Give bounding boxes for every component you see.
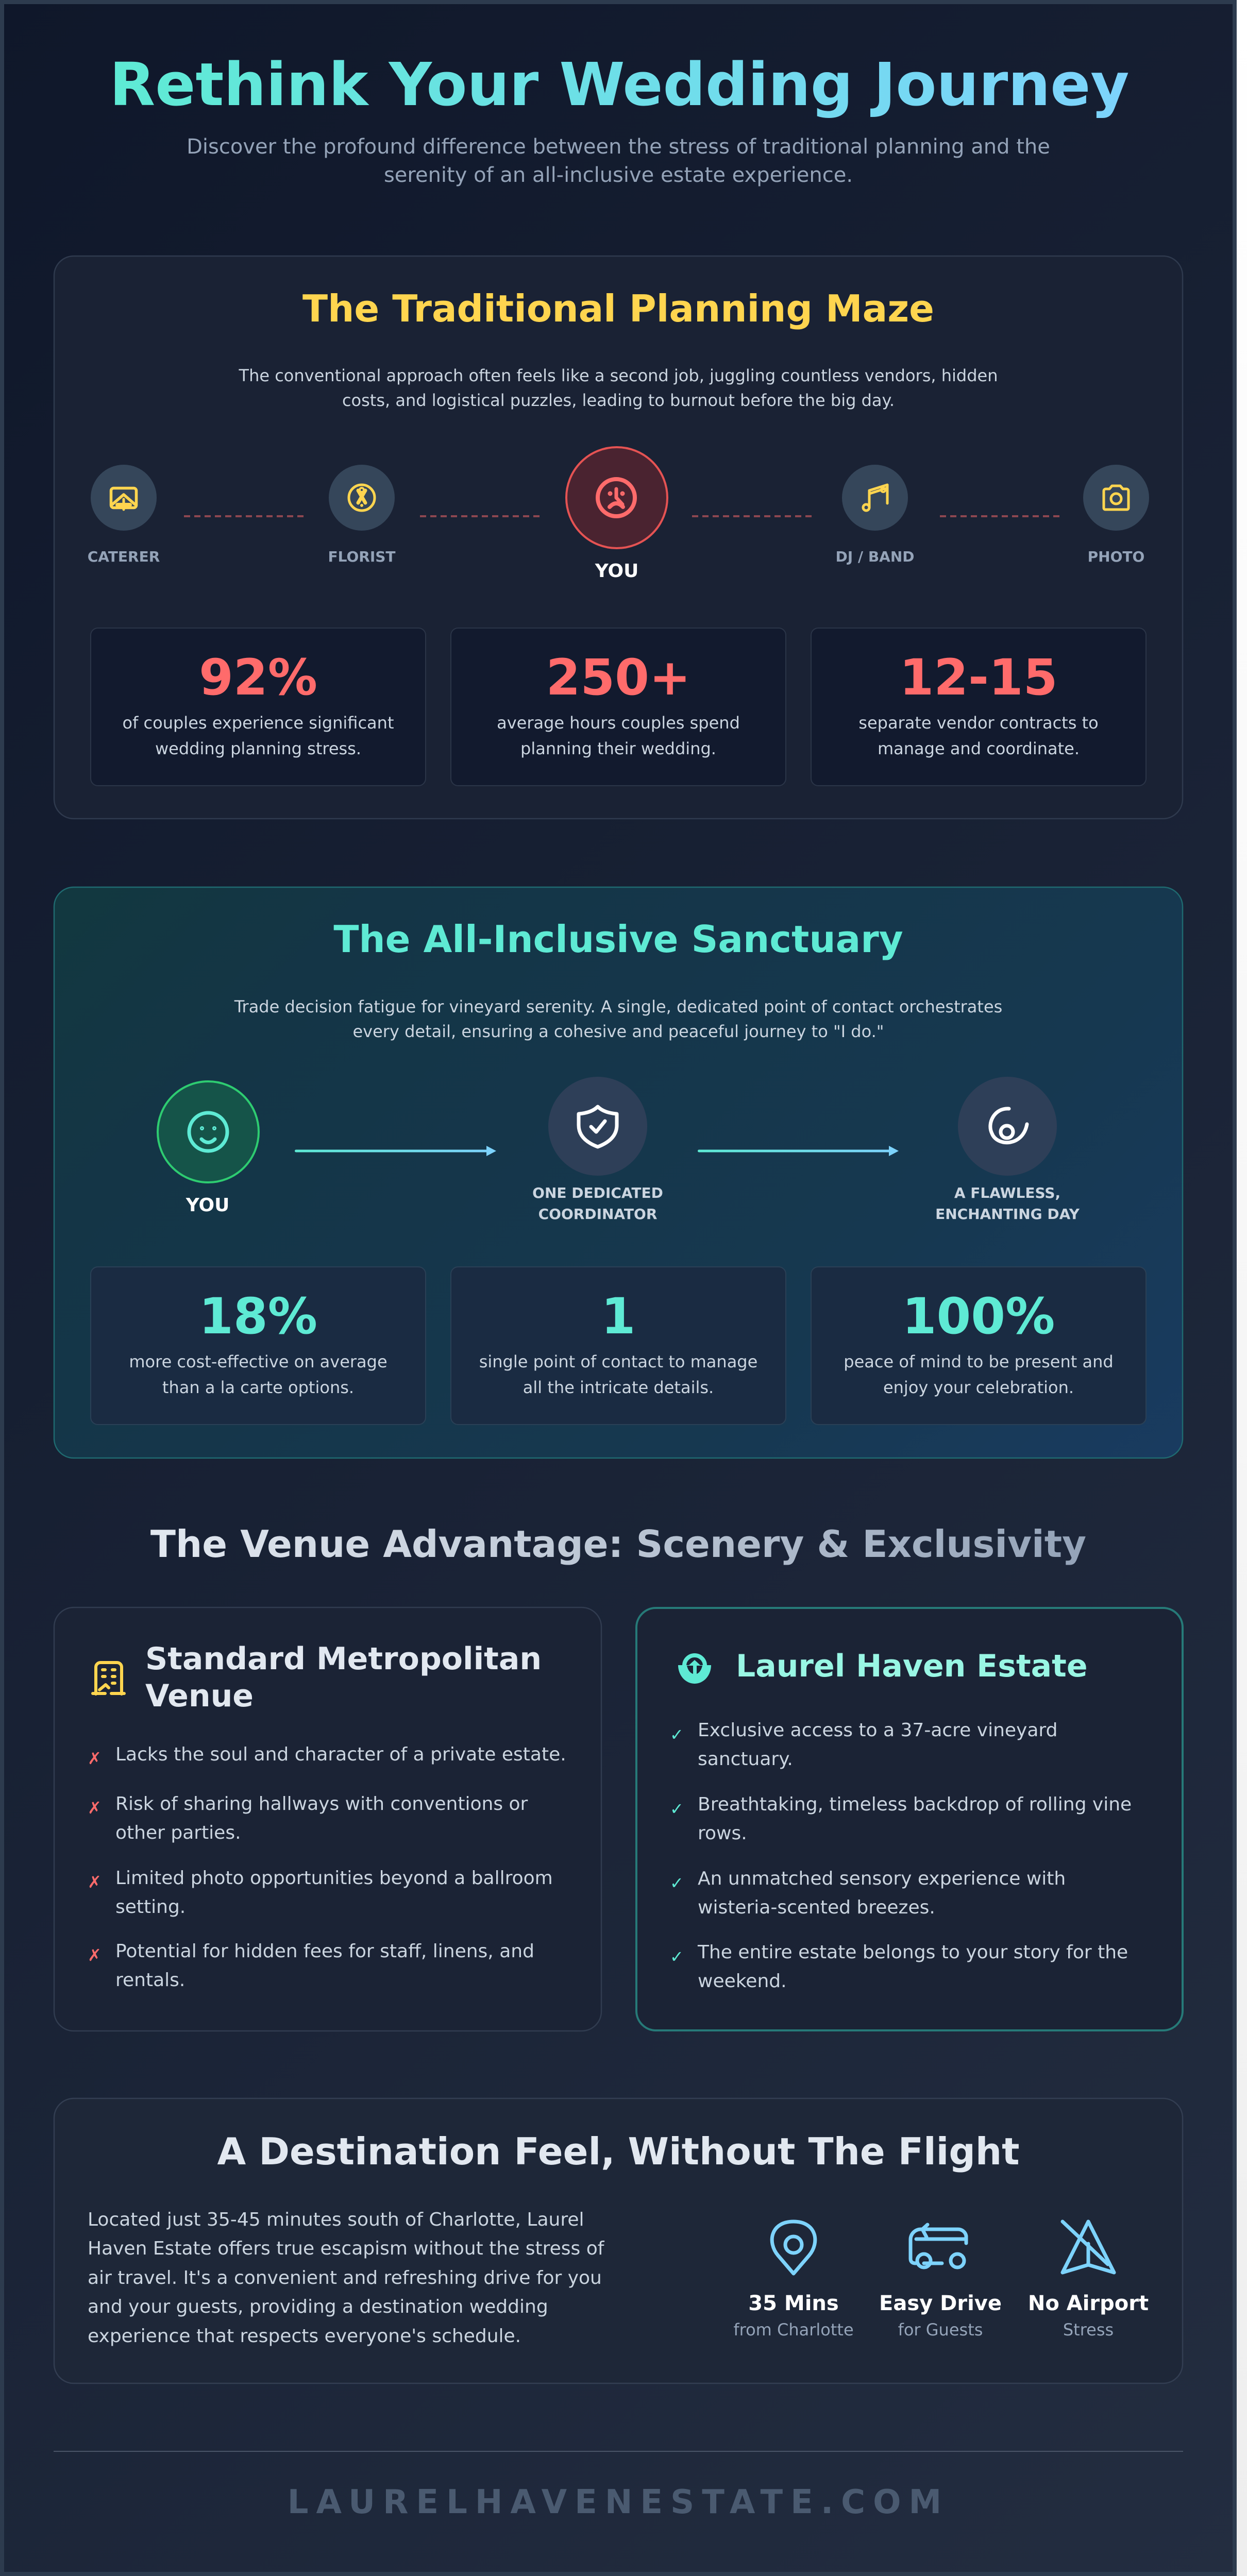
list: advantages: ✓ <box>670 1799 684 1819</box>
list: advantages: weekend. <box>698 1971 787 1992</box>
stat: 250+: average hours couples spend <box>497 713 740 733</box>
subtitle: Discover the profound difference between the stress of traditional planning and the <box>187 135 1050 159</box>
icon: bus <box>911 2225 966 2267</box>
node: dj / band <box>835 465 915 565</box>
stat: 92%: of couples experience significant <box>123 713 394 733</box>
stat: 12-15: manage and coordinate. <box>878 739 1080 758</box>
subtitle: serenity of an all-inclusive estate experience. <box>384 163 853 187</box>
icon: map pin <box>772 2222 815 2274</box>
body text: Located just 35-45 minutes south of Charlotte, Laurel <box>88 2209 584 2230</box>
list: drawbacks: ✗ <box>88 1798 102 1818</box>
stat: 1 <box>451 1267 786 1425</box>
feature: no airport: Stress <box>1063 2320 1114 2340</box>
node: one dedicated coordinator <box>532 1077 663 1223</box>
stat: 18% <box>91 1267 426 1425</box>
stat: 92%: 92% <box>199 649 317 706</box>
stat: 92% <box>91 628 426 786</box>
node: caterer <box>88 465 160 565</box>
node: florist: FLORIST <box>328 548 396 565</box>
body text: experience that respects everyone's schedule. <box>88 2326 521 2347</box>
node: photo <box>1083 465 1149 565</box>
node: photo: PHOTO <box>1088 548 1144 565</box>
stat: 1: single point of contact to manage <box>479 1352 757 1371</box>
list: advantages: ✓ <box>670 1873 684 1893</box>
list: drawbacks: rentals. <box>115 1970 185 1991</box>
stat: 250+: planning their wedding. <box>520 739 716 758</box>
node: you (stressed): YOU <box>595 561 638 582</box>
list: advantages: Breathtaking, timeless backdrop of rolling vine <box>698 1794 1132 1815</box>
list: advantages: ✓ <box>670 1725 684 1744</box>
panel: traditional planning maze <box>54 256 1183 819</box>
icon: crossed paper plane <box>1063 2222 1114 2273</box>
stat: 1: 1 <box>601 1287 635 1345</box>
node: flawless day: ENCHANTING DAY <box>935 1206 1080 1223</box>
heading: The Traditional Planning Maze <box>302 287 934 330</box>
intro text: The conventional approach often feels like a second job, juggling countless vendors, hidden <box>239 366 998 385</box>
stat: 100%: peace of mind to be present and <box>844 1352 1114 1371</box>
node: you (stressed) <box>566 447 667 582</box>
node: flawless day <box>935 1077 1080 1223</box>
icon: shield check <box>579 1107 617 1147</box>
icon: building <box>93 1663 124 1694</box>
heading: The All-Inclusive Sanctuary <box>333 918 903 961</box>
node: flawless day: A FLAWLESS, <box>954 1184 1060 1201</box>
node: you (calm): YOU <box>186 1195 229 1216</box>
card title: Laurel Haven Estate <box>736 1648 1088 1684</box>
icon: florist <box>349 485 375 511</box>
stat: 100% <box>811 1267 1146 1425</box>
stat: 12-15 <box>811 628 1146 786</box>
intro text <box>234 997 1002 1041</box>
card title <box>145 1641 542 1714</box>
stat: 18%: 18% <box>199 1287 317 1345</box>
node: dj / band: DJ / BAND <box>835 548 915 565</box>
heading: A Destination Feel, Without The Flight <box>217 2130 1020 2173</box>
list: drawbacks <box>88 1744 566 1991</box>
panel: all-inclusive sanctuary <box>54 887 1183 1458</box>
icon: smile <box>189 1113 227 1151</box>
intro text: costs, and logistical puzzles, leading to burnout before the big day. <box>342 391 895 410</box>
stat: 250+ <box>451 628 786 786</box>
feature: no airport: No Airport <box>1028 2292 1149 2315</box>
feature: 35 mins: 35 Mins <box>748 2292 839 2315</box>
heading: venue advantage: The Venue Advantage: Scenery & Exclusivity <box>150 1522 1086 1566</box>
subtitle <box>187 135 1050 187</box>
list: drawbacks: ✗ <box>88 1872 102 1892</box>
list: drawbacks: Potential for hidden fees for staff, linens, and <box>115 1941 534 1962</box>
stat: 100%: enjoy your celebration. <box>883 1378 1074 1397</box>
stat: 18%: than a la carte options. <box>162 1378 354 1397</box>
arrow 1 <box>295 1146 496 1156</box>
icon: rings swirl <box>990 1109 1027 1143</box>
list: advantages: ✓ <box>670 1947 684 1967</box>
icon: estate badge <box>678 1655 711 1684</box>
stat: 12-15: separate vendor contracts to <box>858 713 1099 733</box>
stat: 250+: 250+ <box>546 649 690 706</box>
feature: 35 mins: from Charlotte <box>733 2320 854 2340</box>
panel: laurel haven estate <box>636 1608 1183 2030</box>
feature: 35 mins <box>733 2222 854 2340</box>
node: one dedicated coordinator: ONE DEDICATED <box>532 1184 663 1201</box>
intro text <box>239 366 998 410</box>
footer divider <box>54 2451 1183 2452</box>
list: drawbacks: other parties. <box>115 1822 241 1843</box>
stat: 92%: wedding planning stress. <box>155 739 361 758</box>
panel: standard metropolitan venue <box>54 1607 601 2031</box>
list: drawbacks: setting. <box>115 1896 186 1918</box>
node: one dedicated coordinator: COORDINATOR <box>538 1206 657 1223</box>
feature: easy drive: for Guests <box>898 2320 983 2340</box>
list: advantages <box>670 1720 1132 1992</box>
footer: website: LAURELHAVENESTATE.COM <box>288 2483 949 2521</box>
body text <box>88 2209 605 2347</box>
list: advantages: The entire estate belongs to your story for the <box>697 1942 1128 1963</box>
list: advantages: wisteria-scented breezes. <box>698 1897 935 1918</box>
list: drawbacks: Risk of sharing hallways with conventions or <box>115 1793 528 1815</box>
card title: Venue <box>145 1678 254 1714</box>
node: caterer: CATERER <box>88 548 160 565</box>
icon: camera <box>1104 486 1128 510</box>
intro text: every detail, ensuring a cohesive and peaceful journey to "I do." <box>352 1022 884 1041</box>
body text: Haven Estate offers true escapism without the stress of <box>88 2238 605 2259</box>
list: drawbacks: Limited photo opportunities beyond a ballroom <box>115 1868 553 1889</box>
node: you (calm) <box>158 1081 259 1216</box>
connector lines <box>184 515 1061 517</box>
list: advantages: Exclusive access to a 37-acre vineyard <box>698 1720 1057 1741</box>
icon: music note <box>863 485 887 511</box>
body text: air travel. It's a convenient and refreshing drive for you <box>88 2267 602 2289</box>
title: Rethink Your Wedding Journey <box>109 50 1130 120</box>
intro text: Trade decision fatigue for vineyard serenity. A single, dedicated point of contact orchestrates <box>234 997 1002 1016</box>
stat: 100%: 100% <box>902 1287 1055 1345</box>
arrow 2 <box>698 1146 899 1156</box>
stat: 1: all the intricate details. <box>523 1378 714 1397</box>
icon: caterer <box>111 488 136 510</box>
icon: stressed face <box>598 479 635 516</box>
list: advantages: An unmatched sensory experience with <box>698 1868 1066 1889</box>
list: drawbacks: ✗ <box>88 1945 102 1965</box>
feature: easy drive <box>879 2225 1002 2340</box>
card title: Standard Metropolitan <box>145 1641 542 1677</box>
list: advantages: rows. <box>698 1823 747 1844</box>
list: advantages: sanctuary. <box>698 1749 793 1770</box>
feature: no airport <box>1028 2222 1149 2340</box>
stat: 12-15: 12-15 <box>899 649 1058 706</box>
list: drawbacks: ✗ <box>88 1749 102 1768</box>
node: florist <box>328 465 396 565</box>
list: drawbacks: Lacks the soul and character of a private estate. <box>115 1744 566 1765</box>
body text: and your guests, providing a destination wedding <box>88 2296 548 2317</box>
panel: destination feel <box>54 2098 1183 2383</box>
stat: 18%: more cost-effective on average <box>129 1352 387 1371</box>
feature: easy drive: Easy Drive <box>879 2292 1002 2315</box>
